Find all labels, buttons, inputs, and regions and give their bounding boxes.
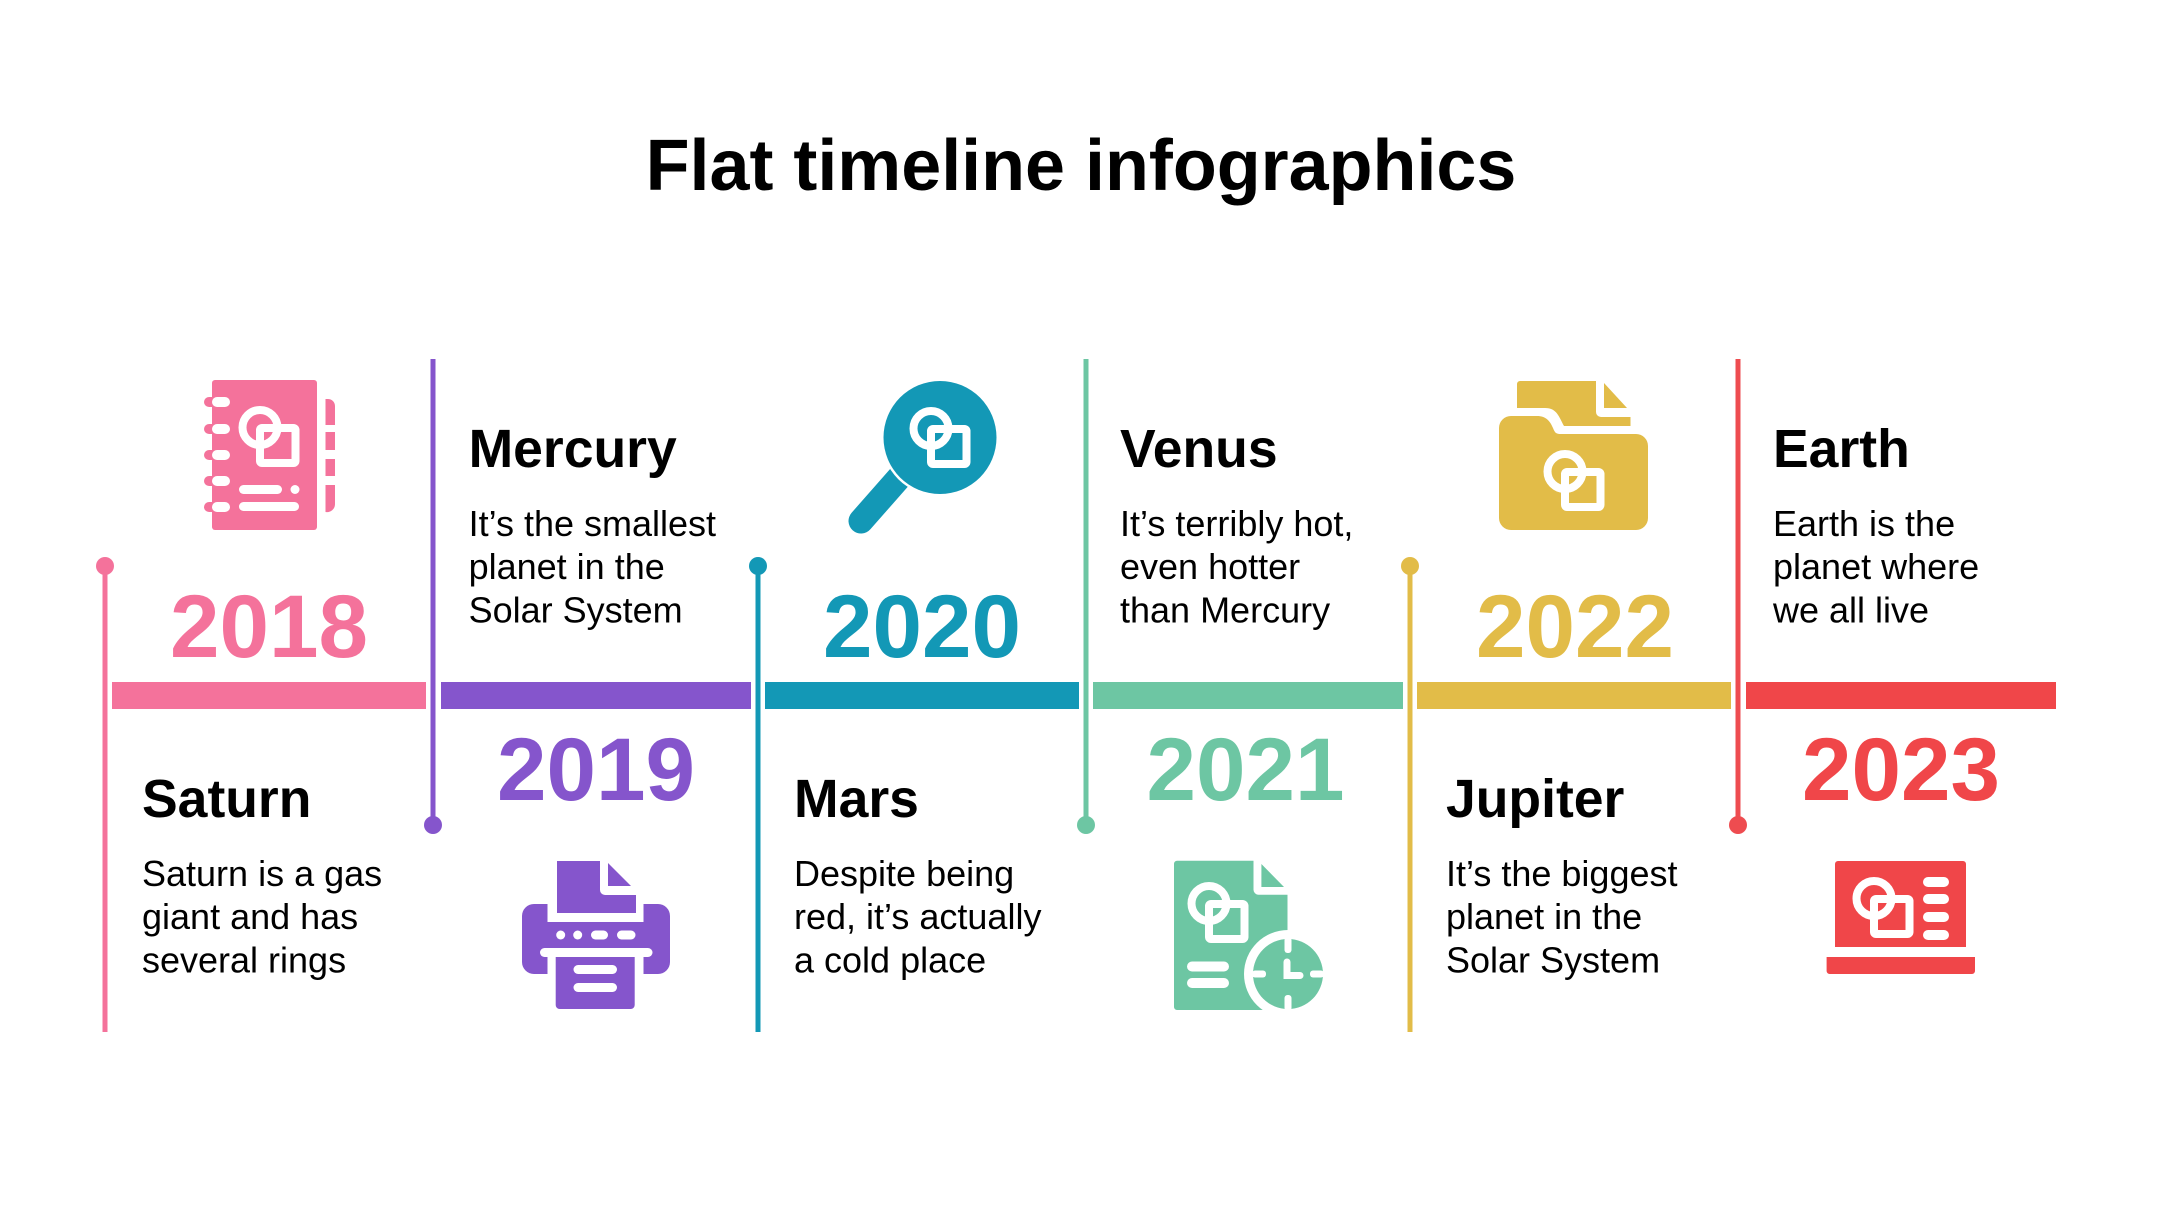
connector line: Mercury	[424, 359, 442, 834]
timeline bar: 2019	[441, 682, 751, 709]
text: Earth: we all live	[1772, 590, 1929, 630]
icon: laptop	[1827, 861, 1975, 974]
text: Saturn: Saturn is a gas	[142, 853, 382, 894]
text: Jupiter: It’s the biggest	[1446, 853, 1678, 894]
connector line: Mars	[749, 557, 767, 1032]
icon: document with clock	[1174, 861, 1332, 1018]
icon: notebook	[204, 380, 335, 530]
text: Mercury: Solar System	[469, 590, 683, 630]
icon: folder	[1499, 381, 1648, 530]
panel: 2020 Mars	[749, 378, 1079, 1032]
text: Venus: than Mercury	[1120, 590, 1330, 630]
text: Earth: planet where	[1773, 546, 1979, 587]
text: Mars: a cold place	[794, 940, 986, 980]
timeline bar: 2023	[1746, 682, 2056, 709]
text: Jupiter: planet in the	[1446, 896, 1642, 937]
text: Earth: Earth is the	[1773, 503, 1955, 544]
text: Earth: Earth	[1773, 420, 1910, 479]
panel: 2022 Jupiter	[1401, 381, 1731, 1032]
text: Jupiter	[1446, 770, 1678, 980]
text: Saturn: giant and has	[142, 896, 358, 937]
year: 2023: 2023	[1802, 719, 2000, 819]
text: Mercury	[469, 420, 716, 630]
connector line: Venus	[1077, 359, 1095, 834]
text: Mars: Despite being	[794, 853, 1014, 894]
text: Venus: It’s terribly hot,	[1120, 503, 1353, 544]
timeline bar: 2018	[112, 682, 426, 709]
year: 2019: 2019	[497, 719, 695, 819]
text: Saturn: Saturn	[142, 770, 311, 829]
timeline bar: 2020	[765, 682, 1079, 709]
year: 2018: 2018	[170, 576, 368, 676]
text: Mercury: Mercury	[469, 420, 677, 479]
text: Saturn	[142, 770, 382, 980]
timeline bar: 2022	[1417, 682, 1731, 709]
text: Earth	[1772, 420, 1979, 630]
panel: 2018 Saturn	[96, 380, 426, 1032]
panel: 2021 Venus	[1077, 359, 1403, 1018]
text: Venus: Venus	[1120, 420, 1278, 479]
timeline bar: 2021	[1093, 682, 1403, 709]
text: Saturn: several rings	[142, 940, 346, 980]
text: Jupiter: Solar System	[1446, 940, 1660, 980]
title: Flat timeline infographics	[646, 126, 1516, 206]
panel: 2023 Earth	[1729, 359, 2056, 974]
text: Mercury: planet in the	[469, 546, 665, 587]
connector line: Earth	[1729, 359, 1747, 834]
text: Venus: even hotter	[1120, 546, 1300, 587]
text: Mercury: It’s the smallest	[469, 503, 716, 544]
text: Mars	[794, 770, 1041, 980]
panel: 2019 Mercury	[424, 359, 751, 1009]
year: 2021: 2021	[1146, 719, 1344, 819]
icon: magnifier	[861, 378, 999, 521]
year: 2020: 2020	[823, 576, 1021, 676]
text: Venus	[1120, 420, 1353, 630]
year: 2022: 2022	[1476, 576, 1674, 676]
connector line: Saturn	[96, 557, 114, 1032]
text: Mars: Mars	[794, 770, 919, 829]
icon: printer	[522, 861, 670, 1009]
text: Mars: red, it’s actually	[794, 896, 1041, 937]
text: Jupiter: Jupiter	[1446, 770, 1625, 829]
connector line: Jupiter	[1401, 557, 1419, 1032]
